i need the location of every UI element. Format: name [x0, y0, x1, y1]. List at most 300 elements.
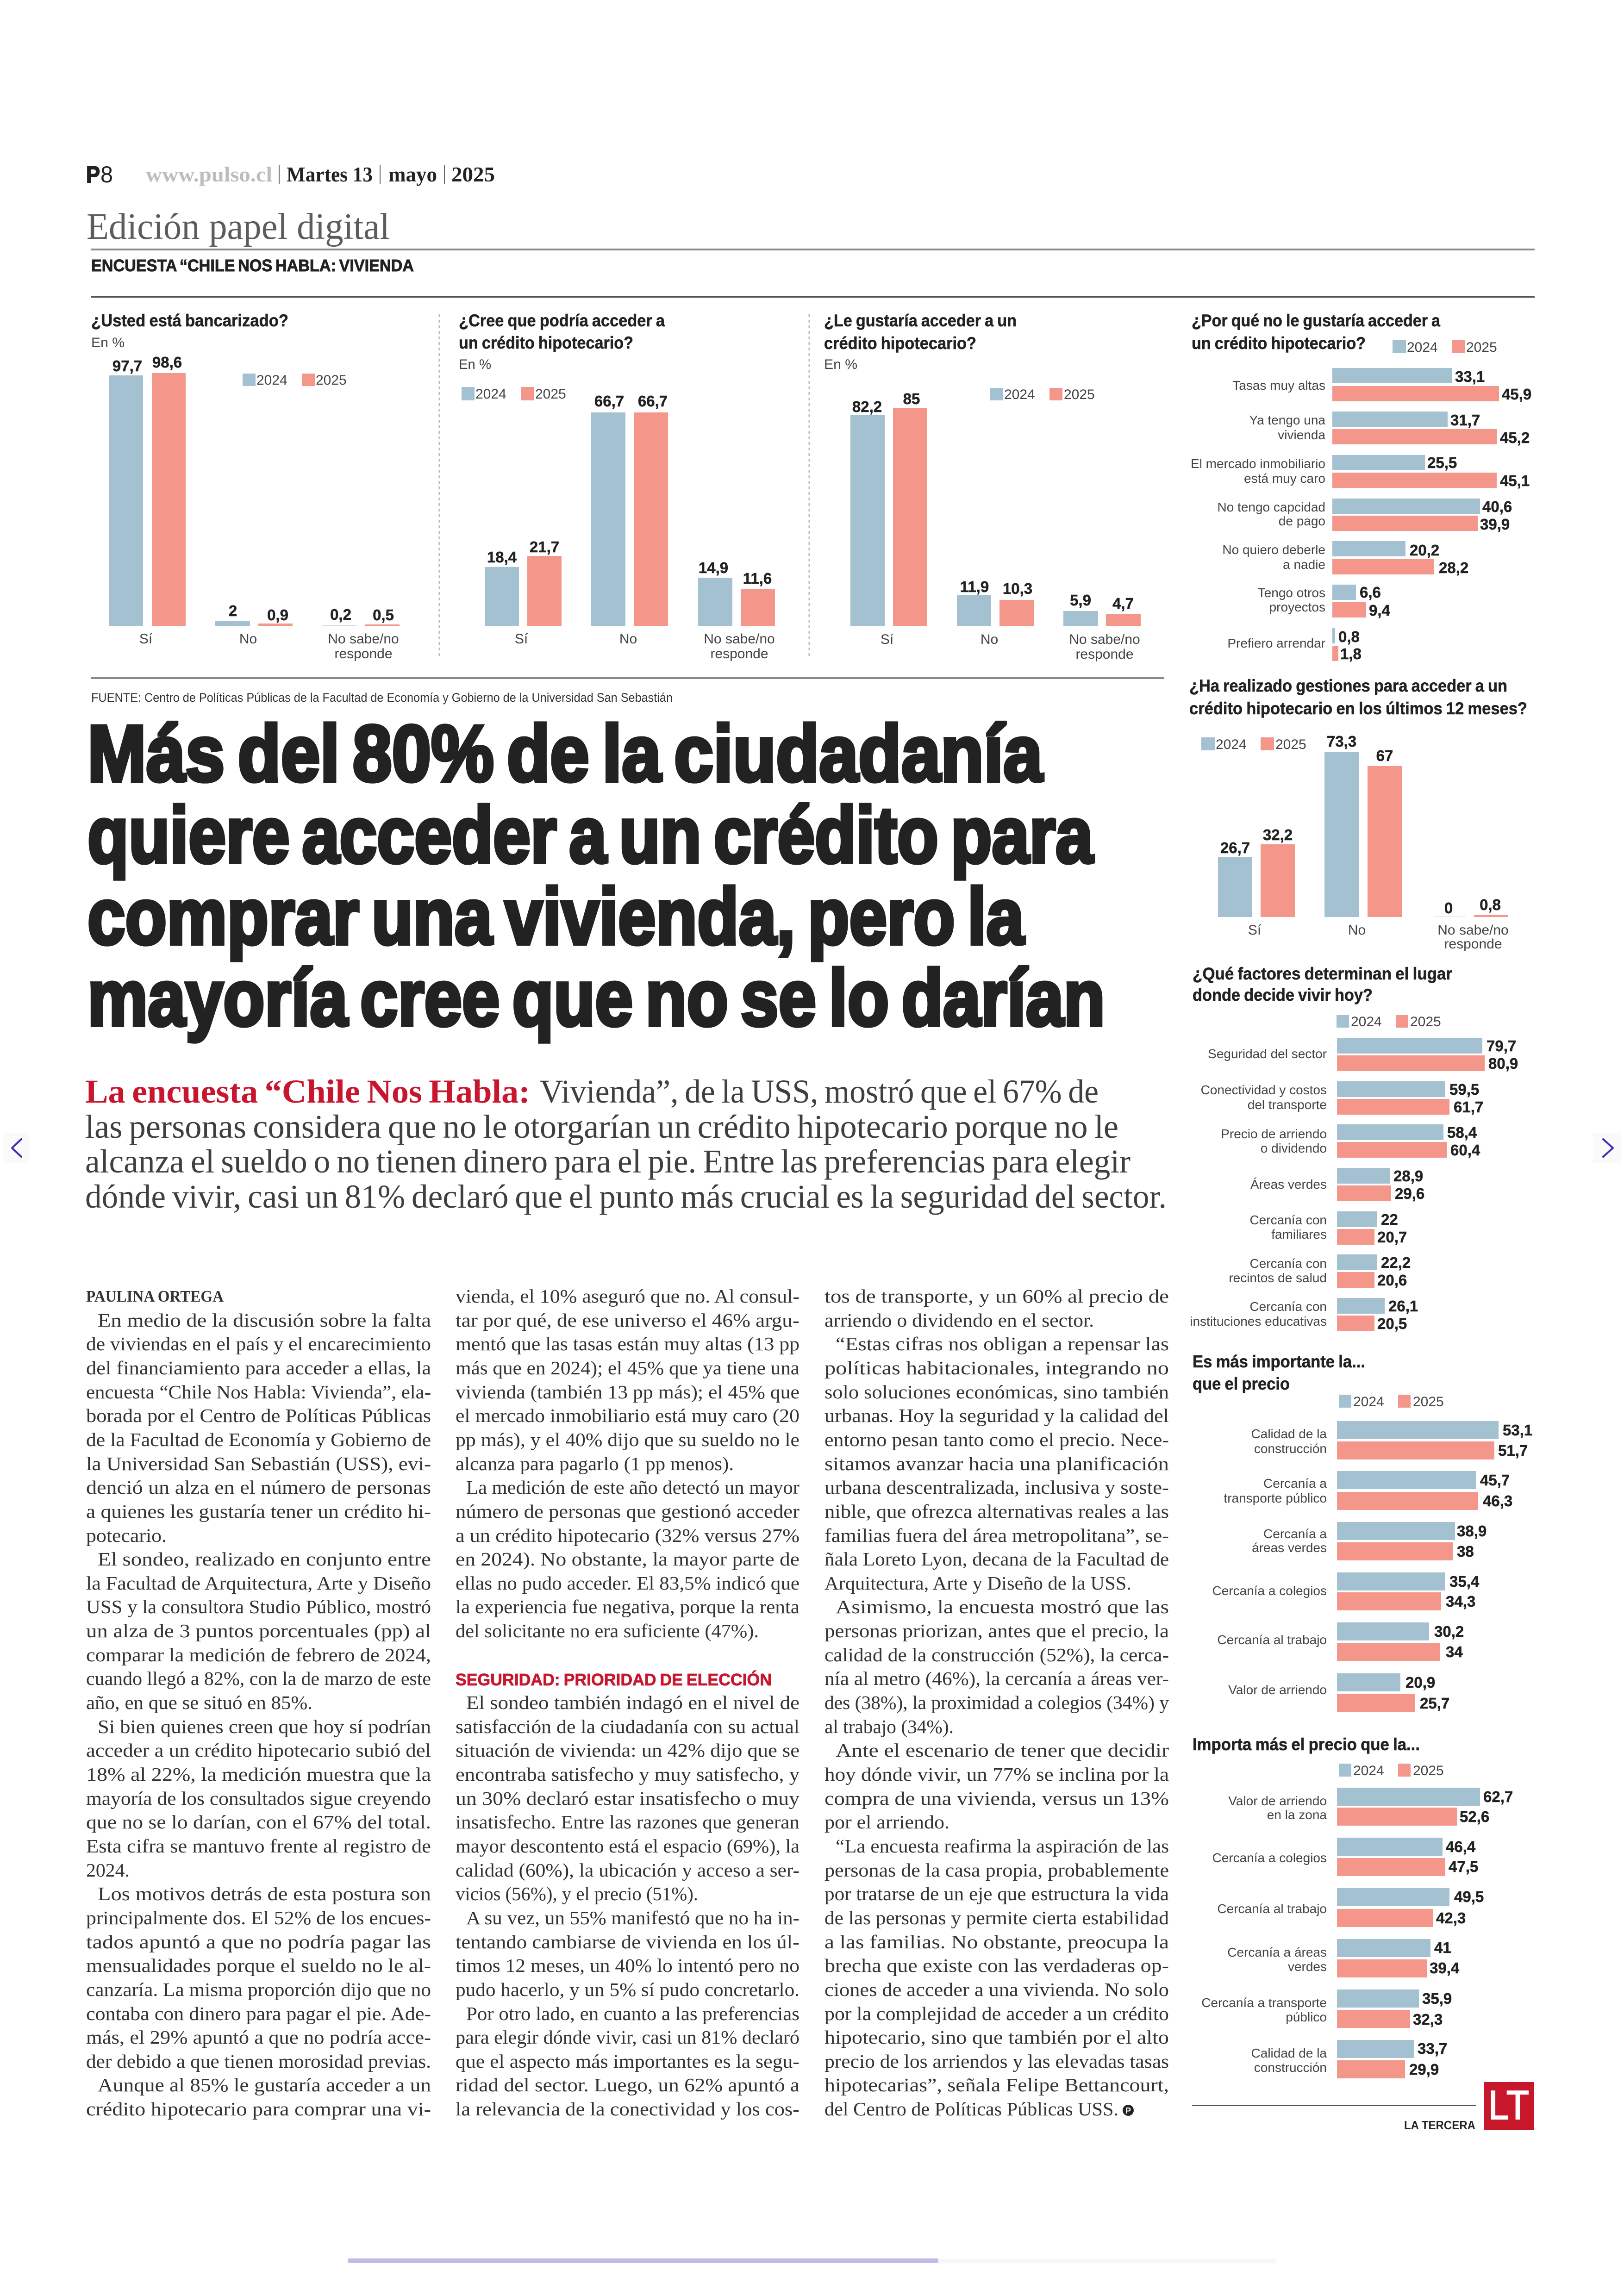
legend: 2025: [1466, 340, 1497, 355]
deck paragraph: La encuesta “Chile Nos Habla:: [85, 1073, 530, 1110]
column 2 text upper: La medición de este año detectó un mayor: [466, 1477, 800, 1498]
article body column 3: Ante el escenario de tener que decidir: [836, 1740, 1169, 1761]
heading: ¿Le gustaría acceder a un: [824, 311, 1017, 330]
article body column 3: hipotecario, sino que también por el alto: [824, 2027, 1169, 2048]
heading: En %: [91, 335, 125, 350]
row: Cercanía a colegios: [1212, 1838, 1478, 1876]
row: Precio de arriendo o dividendo: 60,4: [1450, 1141, 1480, 1159]
bars: No: No: [981, 632, 998, 647]
column 1 text: mayoría de los consultados sigue creyendo: [86, 1788, 431, 1809]
column 2 text lower: situación de vivienda: un 42% dijo que se: [456, 1740, 800, 1761]
row: Cercanía a áreas verdes: verdes: [1288, 1959, 1327, 1974]
panel: ¿Le gustaría acceder a un crédito hipotecario?: [824, 311, 1141, 662]
bars: No sabe/no responde: responde: [1444, 936, 1502, 952]
deck paragraph: las personas considera que no le otorgarían un crédito hipotecario porque no le: [85, 1108, 1118, 1145]
row: Seguridad del sector: 80,9: [1488, 1055, 1518, 1072]
article body column 3: hoy dónde vivir, un 77% se inclina por la: [824, 1764, 1169, 1785]
bars: No: 67: [1376, 747, 1393, 764]
bars: No sabe/no responde: responde: [334, 646, 393, 661]
column 1 text: Si bien quienes creen que hoy sí podrían: [98, 1716, 431, 1737]
row: Conectividad y costos del transporte: del transporte: [1248, 1098, 1327, 1112]
legend: [1393, 340, 1497, 355]
column 2 text lower: satisfacción de la ciudadanía con su actual: [456, 1716, 800, 1737]
bars: Sí: Sí: [881, 632, 894, 647]
page header: 8: [100, 162, 113, 187]
row: Tengo otros proyectos: 9,4: [1369, 602, 1391, 619]
row: Cercanía con familiares: 22: [1381, 1211, 1398, 1228]
bars: No: 66,7: [638, 393, 668, 410]
bars: Sí: Sí: [139, 631, 153, 647]
legend: 2024: [1353, 1763, 1384, 1778]
column 2 text upper: tar por qué, de ese universo el 46% argu-: [456, 1310, 800, 1331]
column 2 text lower: insatisfecho. Entre las razones que generan: [456, 1811, 800, 1833]
legend: 2024: [1353, 1394, 1384, 1409]
bars: Sí: 98,6: [152, 354, 182, 371]
page header: 2025: [451, 162, 495, 186]
row: Valor de arriendo: 25,7: [1420, 1695, 1449, 1712]
row: Cercanía a colegios: Cercanía a colegios: [1212, 1584, 1327, 1598]
row: Cercanía a áreas verdes: 38: [1457, 1543, 1474, 1560]
legend: [462, 387, 566, 402]
row: Cercanía a áreas verdes: Cercanía a: [1263, 1527, 1327, 1541]
article body column 3: personas priorizan, antes que el precio, la: [824, 1620, 1169, 1641]
bars: No: 73,3: [1327, 733, 1356, 750]
legend: 2025: [1064, 387, 1095, 402]
column 1 text: más, el 29% apuntó a que no podría acce-: [86, 2027, 431, 2048]
row: Tasas muy altas: 33,1: [1455, 368, 1485, 385]
row: Valor de arriendo: 20,9: [1405, 1674, 1435, 1691]
column 1 text: comparar la medición de febrero de 2024,: [86, 1644, 431, 1665]
row: Cercanía a áreas verdes: Cercanía a áreas: [1227, 1945, 1327, 1959]
row: Cercanía al trabajo: 34: [1446, 1643, 1463, 1660]
column 1 text: der debido a que tienen morosidad previas.: [86, 2051, 431, 2072]
row: Cercanía a áreas verdes: 41: [1434, 1939, 1451, 1956]
article body column 3: urbanas. Hoy la seguridad y la calidad del: [824, 1405, 1169, 1426]
bars: No: 66,7: [594, 393, 624, 410]
legend: 2025: [316, 373, 347, 388]
row: Cercanía a transporte público: 32,3: [1413, 2011, 1443, 2028]
legend: [243, 373, 347, 388]
row: Tasas muy altas: Tasas muy altas: [1232, 378, 1325, 393]
row: Precio de arriendo o dividendo: o dividendo: [1261, 1141, 1327, 1155]
main headline: comprar una vivienda, pero la: [87, 872, 1024, 961]
column 1 text: denció un alza en el número de personas: [86, 1477, 431, 1498]
row: Cercanía a transporte público: 46,3: [1483, 1492, 1512, 1509]
row: Cercanía a colegios: 46,4: [1446, 1838, 1476, 1855]
bars: No sabe/no responde: 0,5: [373, 606, 394, 624]
bars: No sabe/no responde: No sabe/no: [704, 631, 775, 647]
row: Cercanía con instituciones educativas: instituciones educativas: [1190, 1314, 1327, 1328]
legend: 2024: [256, 373, 287, 388]
heading: Importa más el precio que la...: [1193, 1735, 1420, 1754]
row: Cercanía a áreas verdes: [1252, 1522, 1487, 1560]
column 1 text: la Universidad San Sebastián (USS), evi-: [86, 1453, 431, 1474]
bars: Sí: 32,2: [1263, 826, 1293, 843]
deck paragraph: [85, 1073, 1167, 1215]
column 1 text: USS y la consultora Studio Público, mostró: [86, 1596, 431, 1617]
article body column 3: [824, 1285, 1169, 2120]
article body column 3: compra de una vivienda, versus un 13%: [824, 1788, 1169, 1809]
bars: No: 10,3: [1003, 580, 1032, 597]
article body column 3: brecha que existe con las verdaderas op-: [824, 1955, 1169, 1976]
bars: Sí: [1218, 826, 1295, 938]
column 2 text upper: a un crédito hipotecario (32% versus 27%: [456, 1525, 800, 1546]
row: Tasas muy altas: 45,9: [1502, 386, 1531, 403]
row: Cercanía a transporte público: [1201, 1989, 1452, 2028]
legend: [1339, 1394, 1444, 1409]
bars: No: [957, 578, 1034, 647]
column 1 text: canzaría. La misma proporción dijo que no: [86, 1979, 431, 2000]
main headline: [87, 709, 1105, 1042]
article body column 3: políticas habitacionales, integrando no: [824, 1357, 1169, 1378]
heading: [1193, 964, 1452, 1004]
column 2 text upper: [456, 1285, 800, 1641]
bars: Sí: [109, 354, 186, 647]
heading: ¿Por qué no le gustaría acceder a: [1192, 311, 1440, 330]
row: Calidad de la construcción: construcción: [1254, 2060, 1327, 2075]
row: Cercanía con familiares: [1249, 1211, 1407, 1246]
column 1 text: acceder a un crédito hipotecario subió del: [86, 1740, 431, 1761]
heading: [1193, 1352, 1365, 1393]
column 1 text: que no se lo darían, con el 67% del total.: [86, 1811, 431, 1833]
legend: [1201, 737, 1306, 752]
article body column 3: nía al metro (46%), la cercanía a áreas ver-: [824, 1668, 1169, 1689]
row: Cercanía al trabajo: 49,5: [1454, 1888, 1484, 1905]
deck paragraph: Vivienda”, de la USS, mostró que el 67% de: [540, 1073, 1099, 1110]
column 2 text lower: vicios (56%), y el precio (51%).: [456, 1883, 698, 1904]
row: Prefiero arrendar: 1,8: [1340, 645, 1362, 662]
bars: No sabe/no responde: 0: [1444, 899, 1453, 917]
column 1 text: del financiamiento para acceder a ellas, la: [86, 1357, 431, 1378]
row: No tengo capcidad de pago: No tengo capcidad: [1217, 500, 1325, 514]
heading: Es más importante la...: [1193, 1352, 1365, 1371]
panel: Importa más el precio que la...: [1193, 1735, 1513, 2078]
row: Cercanía al trabajo: 42,3: [1436, 1909, 1466, 1927]
article body column 2: [456, 1285, 800, 2120]
panel: ¿Qué factores determinan el lugar donde decide vivir hoy?: [1190, 964, 1518, 1332]
row: El mercado inmobiliario está muy caro: [1191, 454, 1530, 489]
row: Ya tengo una vivienda: [1249, 412, 1530, 446]
row: Valor de arriendo en la zona: 52,6: [1460, 1808, 1489, 1825]
bars: No sabe/no responde: No sabe/no: [1069, 632, 1140, 647]
heading: [91, 311, 288, 350]
legend: 2025: [1275, 737, 1306, 752]
bars: No sabe/no responde: 0,2: [330, 606, 351, 623]
main headline: quiere acceder a un crédito para: [87, 791, 1093, 879]
row: Cercanía a colegios: 47,5: [1449, 1858, 1478, 1875]
column 1 text: mensualidades porque el sueldo no le al-: [86, 1955, 431, 1976]
article body column 3: solo soluciones económicas, sino también: [824, 1381, 1169, 1403]
row: Tengo otros proyectos: 6,6: [1360, 584, 1381, 601]
row: Cercanía a transporte público: Cercanía a transporte: [1201, 1996, 1327, 2010]
row: El mercado inmobiliario está muy caro: El mercado inmobiliario: [1191, 456, 1325, 471]
bars: No: No: [619, 631, 637, 647]
page header: www.pulso.cl: [146, 162, 272, 186]
panel: Es más importante la... que el precio: [1193, 1352, 1532, 1712]
column 2 text upper: vienda, el 10% aseguró que no. Al consul-: [456, 1285, 800, 1307]
column 2 text upper: del solicitante no era suficiente (47%).: [456, 1620, 759, 1641]
row: Cercanía a áreas verdes: 38,9: [1457, 1522, 1487, 1540]
article body column 3: personas de la casa propia, probablemente: [824, 1859, 1169, 1881]
column 1 text: Esta cifra se mantuvo frente al registro de: [86, 1835, 431, 1857]
article body column 3: sitamos avanzar hacia una planificación: [824, 1453, 1169, 1474]
column 2 text lower: calidad (60%), la ubicación y acceso a ser-: [456, 1859, 800, 1881]
row: Tengo otros proyectos: [1258, 584, 1391, 619]
main headline: Más del 80% de la ciudadanía: [87, 709, 1043, 798]
column 1 text: Los motivos detrás de esta postura son: [98, 1883, 431, 1904]
legend: [1337, 1014, 1441, 1029]
row: No quiero deberle a nadie: [1222, 541, 1468, 576]
column 2 text lower: la relevancia de la conectividad y los cos-: [456, 2098, 800, 2120]
bars: No sabe/no responde: 5,9: [1070, 592, 1091, 609]
row: Tasas muy altas: [1232, 368, 1531, 403]
row: No tengo capcidad de pago: 40,6: [1482, 498, 1512, 515]
row: Tengo otros proyectos: Tengo otros: [1258, 586, 1325, 600]
legend: [990, 387, 1095, 402]
heading: un crédito hipotecario?: [459, 333, 633, 352]
column 1 text: un alza de 3 puntos porcentuales (pp) al: [86, 1620, 431, 1641]
column 1 text: tados apuntó a que no podría pagar las: [86, 1931, 431, 1952]
column 2 text lower: pudo hacerlo, y un 5% sí pudo concretarlo.: [456, 1979, 800, 2000]
bars: Sí: 26,7: [1220, 839, 1250, 856]
article body column 3: ñala Loreto Lyon, decana de la Facultad de: [824, 1548, 1169, 1570]
bars: No sabe/no responde: [1434, 896, 1509, 952]
column 1 text: El sondeo, realizado en conjunto entre: [98, 1548, 431, 1570]
row: No tengo capcidad de pago: de pago: [1279, 514, 1325, 528]
icon: end mark: [1123, 2105, 1134, 2116]
row: Cercanía al trabajo: Cercanía al trabajo: [1217, 1633, 1327, 1647]
column 2 text upper: más que en 2024); el 45% que ya tiene una: [456, 1357, 800, 1378]
legend: 2024: [1351, 1014, 1382, 1029]
row: No quiero deberle a nadie: 28,2: [1439, 559, 1468, 576]
legend: 2025: [1413, 1763, 1444, 1778]
column 2 text lower: mayor descontento está el espacio (69%), la: [456, 1835, 800, 1857]
row: Ya tengo una vivienda: 45,2: [1500, 429, 1530, 446]
row: El mercado inmobiliario está muy caro: 25,5: [1427, 454, 1457, 471]
row: Cercanía a transporte público: 35,9: [1422, 1990, 1452, 2007]
row: Cercanía a transporte público: 45,7: [1480, 1472, 1510, 1489]
bars: No sabe/no responde: responde: [1075, 647, 1134, 662]
column 2 text lower: timos 12 meses, un 40% lo intentó pero no: [456, 1955, 800, 1976]
row: Cercanía al trabajo: 30,2: [1434, 1623, 1464, 1640]
row: Cercanía a colegios: Cercanía a colegios: [1212, 1851, 1327, 1865]
bars: Sí: 18,4: [487, 549, 517, 566]
bars: No: 0,9: [267, 606, 288, 624]
row: Calidad de la construcción: [1251, 1421, 1532, 1459]
row: Cercanía al trabajo: Cercanía al trabajo: [1217, 1902, 1327, 1916]
article body column 3: entorno pesan tanto como el precio. Nece-: [824, 1429, 1169, 1450]
heading: un crédito hipotecario?: [1192, 334, 1366, 353]
row: Cercanía con recintos de salud: 20,6: [1377, 1272, 1407, 1289]
row: Cercanía con instituciones educativas: [1190, 1297, 1418, 1332]
column 1 text: cuando llegó a 82%, con la de marzo de este: [86, 1668, 431, 1689]
row: Cercanía a transporte público: [1224, 1471, 1512, 1510]
row: El mercado inmobiliario está muy caro: está muy caro: [1244, 471, 1325, 486]
row: Valor de arriendo: [1228, 1673, 1449, 1712]
row: Calidad de la construcción: [1251, 2040, 1447, 2078]
row: Cercanía a áreas verdes: [1227, 1939, 1460, 1977]
panel: ¿Por qué no le gustaría acceder a un crédito hipotecario?: [1191, 311, 1531, 662]
heading: [459, 311, 665, 372]
row: Prefiero arrendar: [1227, 628, 1362, 662]
row: Cercanía a colegios: 34,3: [1446, 1593, 1475, 1610]
column 2 text lower: Por otro lado, en cuanto a las preferencias: [466, 2003, 800, 2024]
row: Valor de arriendo en la zona: Valor de arriendo: [1228, 1794, 1327, 1808]
row: Cercanía con recintos de salud: recintos de salud: [1229, 1271, 1327, 1285]
row: Cercanía con familiares: 20,7: [1377, 1229, 1407, 1246]
credit: La Tercera: LA TERCERA: [1404, 2118, 1475, 2132]
row: Seguridad del sector: 79,7: [1487, 1037, 1516, 1054]
row: Cercanía a áreas verdes: áreas verdes: [1252, 1540, 1327, 1555]
survey kicker: ENCUESTA “CHILE NOS HABLA: VIVIENDA: [91, 256, 414, 275]
heading: ¿Cree que podría acceder a: [459, 311, 665, 330]
row: Prefiero arrendar: Prefiero arrendar: [1227, 636, 1325, 650]
column 2 text upper: alcanza para pagarlo (1 pp menos).: [456, 1453, 734, 1474]
bars: No: [1324, 733, 1402, 938]
page header: Martes 13: [287, 162, 373, 186]
article body column 3: ciones de acceder a una vivienda. No solo: [824, 1979, 1169, 2000]
bars: No: No: [239, 631, 257, 647]
row: No quiero deberle a nadie: No quiero deberle: [1222, 543, 1325, 557]
column 2 text upper: pp más), y el 40% dijo que su sueldo no le: [456, 1429, 800, 1450]
row: Cercanía con familiares: familiares: [1271, 1227, 1327, 1241]
source note: FUENTE: Centro de Políticas Públicas de la Facultad de Economía y Gobierno de la Universidad San Sebastián: [91, 691, 673, 705]
heading: En %: [459, 357, 491, 372]
column 2 text lower: para elegir dónde vivir, casi un 81% declaró: [456, 2027, 800, 2048]
bars: Sí: [850, 390, 927, 647]
deck paragraph: dónde vivir, casi un 81% declaró que el punto más crucial es la seguridad del sector.: [85, 1178, 1167, 1215]
row: Calidad de la construcción: 53,1: [1503, 1422, 1532, 1439]
row: Cercanía con recintos de salud: 22,2: [1381, 1254, 1411, 1271]
row: El mercado inmobiliario está muy caro: 45,1: [1500, 472, 1530, 489]
row: Valor de arriendo en la zona: en la zona: [1267, 1808, 1327, 1822]
legend: 2024: [475, 387, 506, 402]
legend: 2025: [1413, 1394, 1444, 1409]
scrollbar: [348, 2258, 1276, 2264]
column 2 text lower: A su vez, un 55% manifestó que no ha in-: [466, 1907, 800, 1928]
row: Calidad de la construcción: 29,9: [1409, 2061, 1439, 2078]
heading: ¿Qué factores determinan el lugar: [1193, 964, 1452, 983]
column 2 text lower: un 30% declaró estar insatisfecho o muy: [456, 1788, 800, 1809]
article body column 3: por el arriendo.: [824, 1811, 949, 1833]
heading: donde decide vivir hoy?: [1193, 985, 1373, 1004]
row: Cercanía a transporte público: público: [1286, 2010, 1327, 2024]
article body column 3: a las familias. No obstante, preocupa la: [824, 1931, 1169, 1952]
row: Ya tengo una vivienda: 31,7: [1450, 412, 1480, 429]
article body column 3: calidad de la construcción (52%), la cerca-: [824, 1644, 1169, 1665]
row: Conectividad y costos del transporte: 61,7: [1454, 1098, 1483, 1116]
legend: 2024: [1407, 340, 1438, 355]
row: Calidad de la construcción: 33,7: [1418, 2040, 1447, 2057]
bars: No sabe/no responde: [1063, 592, 1141, 662]
row: Seguridad del sector: [1208, 1037, 1518, 1072]
byline: PAULINA ORTEGA: [86, 1287, 224, 1305]
article body column 3: Arquitectura, Arte y Diseño de la USS.: [824, 1572, 1131, 1594]
row: Precio de arriendo o dividendo: Precio de arriendo: [1221, 1127, 1327, 1141]
column 2 text lower: El sondeo también indagó en el nivel de: [466, 1692, 800, 1713]
row: No tengo capcidad de pago: [1217, 498, 1512, 533]
bars: No sabe/no responde: 4,7: [1112, 595, 1134, 612]
row: Cercanía a colegios: 35,4: [1449, 1573, 1480, 1590]
legend: 2025: [535, 387, 566, 402]
row: Precio de arriendo o dividendo: 58,4: [1447, 1124, 1477, 1141]
page header: [86, 162, 495, 187]
row: Prefiero arrendar: 0,8: [1338, 628, 1360, 645]
row: Áreas verdes: 28,9: [1393, 1167, 1423, 1185]
main headline: mayoría cree que no se lo darían: [87, 954, 1105, 1042]
column 2 text upper: ellas no pudo acceder. El 83,5% indicó que: [456, 1572, 800, 1594]
article body column 3: “Estas cifras nos obligan a repensar las: [836, 1333, 1169, 1354]
row: Cercanía con instituciones educativas: Cercanía con: [1249, 1299, 1327, 1314]
article body column 3: por la complejidad de acceder a un crédito: [824, 2003, 1169, 2024]
column 1 text: 18% al 22%, la medición muestra que la: [86, 1764, 431, 1785]
row: Calidad de la construcción: Calidad de la: [1251, 1427, 1327, 1441]
column 1 text: [86, 1310, 431, 2120]
row: Tengo otros proyectos: proyectos: [1269, 600, 1325, 614]
column 2 text upper: número de personas que gestionó acceder: [456, 1501, 800, 1522]
icon: end mark: P: [1125, 2106, 1131, 2115]
article body column 1: [86, 1287, 431, 2120]
bars: No sabe/no responde: 0,8: [1480, 896, 1501, 913]
row: Cercanía con instituciones educativas: 26,1: [1388, 1297, 1418, 1315]
column 1 text: Aunque al 85% le gustaría acceder a un: [98, 2074, 431, 2095]
row: Cercanía al trabajo: [1217, 1622, 1464, 1661]
article body column 3: nible, que ofrezca alternativas reales a las: [824, 1501, 1169, 1522]
bars: No: [215, 602, 293, 647]
icon: next arrow: [1593, 1133, 1622, 1163]
article body column 3: al trabajo (34%).: [824, 1716, 954, 1737]
legend: 2025: [1410, 1014, 1441, 1029]
row: Ya tengo una vivienda: Ya tengo una: [1249, 413, 1325, 427]
article body column 3: des (38%), la proximidad a colegios (34%) y: [824, 1692, 1169, 1713]
panel: ¿Ha realizado gestiones?: [1189, 676, 1527, 952]
bars: Sí: Sí: [1248, 923, 1262, 938]
row: Áreas verdes: Áreas verdes: [1250, 1177, 1327, 1191]
column 1 text: crédito hipotecario para comprar una vi-: [86, 2098, 431, 2120]
column 2 text lower: encontraba satisfecho y muy satisfecho, y: [456, 1764, 800, 1785]
row: Valor de arriendo en la zona: 62,7: [1483, 1788, 1513, 1805]
bars: Sí: 21,7: [530, 538, 559, 555]
row: Áreas verdes: [1250, 1167, 1424, 1202]
row: Cercanía con familiares: Cercanía con: [1249, 1213, 1327, 1227]
article body column 3: por tratarse de un eje que estructura la vida: [824, 1883, 1169, 1904]
heading: En %: [824, 357, 857, 372]
article body column 3: del Centro de Políticas Públicas USS.: [824, 2098, 1118, 2120]
panel: ¿Usted está bancarizado?: [91, 311, 400, 661]
column 2 text lower: ridad del sector. Luego, un 62% apuntó a: [456, 2074, 800, 2095]
bars: No sabe/no responde: 11,6: [743, 570, 772, 587]
bars: No sabe/no responde: [698, 559, 775, 661]
column 1 text: borada por el Centro de Políticas Públicas: [86, 1405, 431, 1426]
column 2 text upper: mentó que las tasas están muy altas (13 pp: [456, 1333, 800, 1354]
article body column 3: precio de los arriendos y las elevadas tasas: [824, 2051, 1169, 2072]
legend: 2024: [1004, 387, 1035, 402]
bars: Sí: Sí: [515, 631, 528, 647]
article body column 3: familias fuera del área metropolitana”, se-: [824, 1525, 1169, 1546]
bars: No: 2: [229, 602, 237, 619]
bars: Sí: 97,7: [112, 357, 142, 374]
heading: crédito hipotecario?: [824, 334, 976, 353]
article body column 3: urbana descentralizada, inclusiva y soste-: [824, 1477, 1169, 1498]
logo: LT: LT: [1488, 2082, 1529, 2128]
heading: ¿Usted está bancarizado?: [91, 311, 288, 330]
bars: No: No: [1348, 923, 1366, 938]
article body column 3: tos de transporte, y un 60% al precio de: [824, 1285, 1169, 1307]
article body column 3: arriendo o dividendo en el sector.: [824, 1310, 1094, 1331]
bars: Sí: 82,2: [852, 398, 882, 415]
legend: 2024: [1216, 737, 1247, 752]
row: Calidad de la construcción: 51,7: [1498, 1442, 1528, 1459]
